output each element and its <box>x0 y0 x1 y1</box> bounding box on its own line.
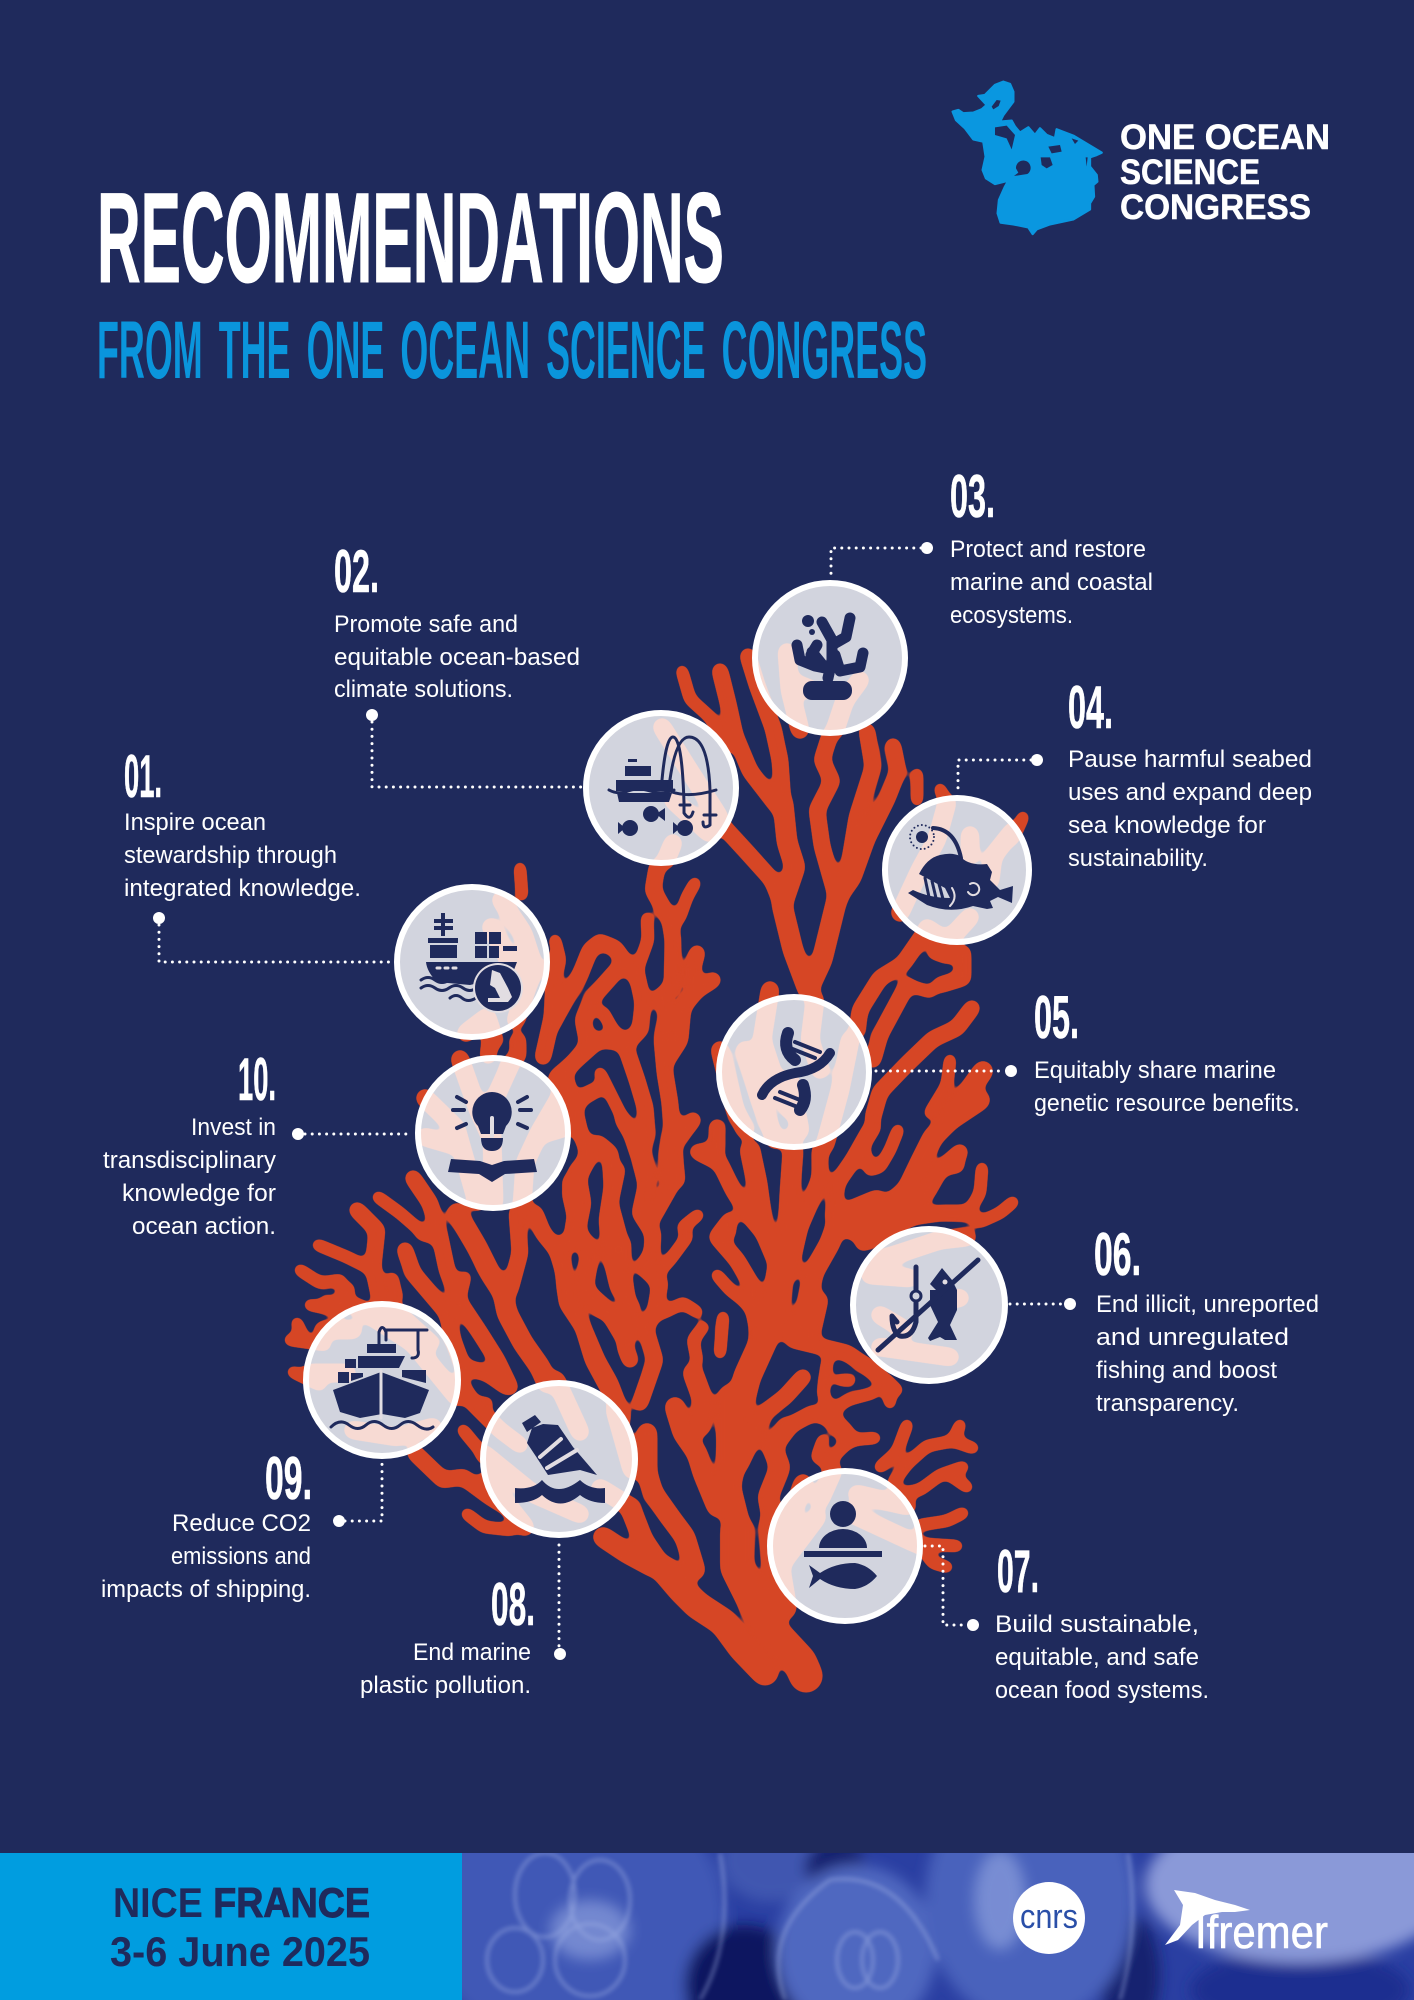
icon: cargo ship with crane <box>331 1328 433 1429</box>
item 03 <box>950 463 1153 629</box>
item 08 <box>360 1571 535 1699</box>
item 09 <box>101 1445 312 1603</box>
footer date: 3-6 June 2025 <box>110 1928 370 1975</box>
logo wordmark: CONGRESS <box>1120 188 1311 227</box>
text 04: Pause harmful seabed <box>1068 746 1312 773</box>
connector 07 <box>925 1546 967 1625</box>
coral illustration <box>290 652 1023 1676</box>
logo wordmark <box>1120 118 1330 227</box>
text 03: Protect and restore <box>950 536 1146 563</box>
number 09: 09. <box>265 1445 312 1512</box>
number 07: 07. <box>997 1538 1039 1605</box>
circle 08: plastic pollution icon <box>483 1383 635 1535</box>
text 09: impacts of shipping. <box>101 1576 311 1603</box>
text 08: End marine <box>413 1639 531 1666</box>
coral behind the circles <box>310 652 1013 1562</box>
connector 10 <box>305 1132 412 1136</box>
number 03: 03. <box>950 463 995 530</box>
text 05 <box>1034 1057 1300 1117</box>
text 04: sustainability. <box>1068 845 1208 872</box>
text 10: transdisciplinary <box>103 1147 276 1174</box>
logo map <box>953 82 1102 234</box>
circle 01: research ship icon <box>397 887 547 1037</box>
text 01: stewardship through <box>124 842 337 869</box>
text 05: Equitably share marine <box>1034 1057 1276 1084</box>
item 05 <box>1034 984 1300 1117</box>
text 07 <box>995 1611 1209 1704</box>
text 10 <box>103 1114 276 1240</box>
connector 08 <box>558 1545 560 1648</box>
item 01: 01. <box>124 743 162 810</box>
text 06 <box>1096 1291 1319 1417</box>
icon: light bulb and open book <box>448 1092 537 1182</box>
number 08: 08. <box>491 1571 535 1638</box>
text 02: Promote safe and <box>334 611 518 638</box>
logo wordmark: SCIENCE <box>1120 153 1260 192</box>
item 04 <box>1068 674 1312 872</box>
circle 07: food systems icon <box>770 1471 920 1621</box>
text 02 <box>334 611 580 703</box>
icon: anglerfish <box>908 825 1013 910</box>
connector lines <box>159 548 1064 1648</box>
text 08 <box>360 1639 531 1699</box>
logo wordmark: ONE OCEAN <box>1120 118 1330 157</box>
infographic canvas: 10. <box>238 1046 276 1113</box>
circle 05: DNA icon <box>719 997 869 1147</box>
text 02: equitable ocean-based <box>334 644 580 671</box>
text 07: ocean food systems. <box>995 1677 1209 1704</box>
footer location: NICE FRANCE <box>113 1879 370 1926</box>
text 06: End illicit, unreported <box>1096 1291 1319 1318</box>
circle 04: anglerfish icon <box>885 798 1029 942</box>
circle 10: knowledge icon <box>418 1058 568 1208</box>
connector 01 <box>159 925 394 962</box>
text 07: equitable, and safe <box>995 1644 1199 1671</box>
icon: person above a fish <box>804 1501 882 1589</box>
text 08: plastic pollution. <box>360 1672 531 1699</box>
connector 06 <box>1010 1302 1064 1306</box>
logo: Ifremer <box>1165 1890 1328 1958</box>
icon: DNA helix <box>762 1033 830 1110</box>
icon: cargo ship with microscope <box>421 913 523 1013</box>
number 06: 06. <box>1094 1221 1141 1288</box>
text 10: ocean action. <box>132 1213 276 1240</box>
circle 03: coral icon <box>755 583 905 733</box>
icon: plastic bottle in water <box>515 1415 605 1504</box>
text 09: emissions and <box>171 1543 311 1570</box>
text 01 <box>124 809 361 902</box>
text 02: climate solutions. <box>334 676 513 703</box>
item 02 <box>334 538 580 703</box>
logo: Ifremer: Ifremer <box>1195 1906 1328 1958</box>
text 04: sea knowledge for <box>1068 812 1266 839</box>
text 06: transparency. <box>1096 1390 1239 1417</box>
text 10: knowledge for <box>122 1180 276 1207</box>
text 05: genetic resource benefits. <box>1034 1090 1300 1117</box>
text 10: Invest in <box>191 1114 276 1141</box>
circle 06: illegal fishing icon <box>853 1229 1005 1381</box>
logo: One Ocean Science Congress <box>953 82 1330 234</box>
text 01: integrated knowledge. <box>124 875 361 902</box>
text 04: uses and expand deep <box>1068 779 1312 806</box>
footer photo: jellyfish <box>462 1853 1414 2000</box>
text 03: ecosystems. <box>950 602 1073 629</box>
item 10 <box>103 1046 276 1240</box>
icon: coral and rock <box>797 615 863 700</box>
connector 05 <box>876 1070 1005 1072</box>
circle 02: ocean climate icon <box>586 713 736 863</box>
text 07: Build sustainable, <box>995 1611 1199 1638</box>
item 07 <box>995 1538 1209 1704</box>
logo: cnrs: cnrs <box>1020 1898 1078 1936</box>
text 03 <box>950 536 1153 629</box>
text 06: and unregulated <box>1096 1324 1289 1351</box>
number 02: 02. <box>334 538 379 605</box>
connector 09 <box>345 1462 382 1521</box>
text 03: marine and coastal <box>950 569 1153 596</box>
connector end dots <box>153 542 1076 1660</box>
footer panel: date and place <box>0 1853 462 2000</box>
text 01: Inspire ocean <box>124 809 266 836</box>
text 09 <box>101 1510 311 1603</box>
text 04 <box>1068 746 1312 872</box>
item 06 <box>1094 1221 1319 1417</box>
text 09: Reduce CO2 <box>172 1510 311 1537</box>
connector 02 <box>372 722 583 787</box>
logo: cnrs <box>1013 1882 1085 1954</box>
number 05: 05. <box>1034 984 1079 1051</box>
connector 04 <box>958 760 1031 792</box>
connector 03 <box>831 548 921 580</box>
text 06: fishing and boost <box>1096 1357 1277 1384</box>
item 01 <box>124 743 361 902</box>
icon: boat, nets and fish <box>609 737 716 836</box>
infographic canvas: RECOMMENDATIONS <box>97 167 724 310</box>
icon: fish and hook crossed out <box>878 1260 978 1350</box>
circle 09: shipping icon <box>306 1304 458 1456</box>
number 04: 04. <box>1068 674 1113 741</box>
